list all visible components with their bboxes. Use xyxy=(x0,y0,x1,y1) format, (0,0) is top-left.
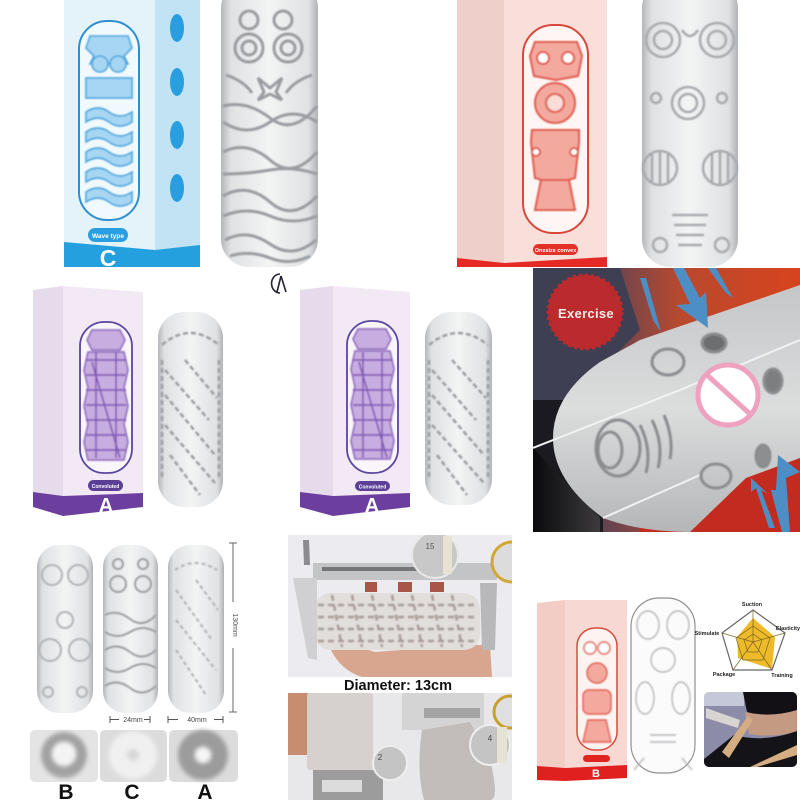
panel: purple convoluted box, left xyxy=(33,286,143,517)
chart: radar: Package xyxy=(713,672,735,678)
caliper, left xyxy=(313,770,383,800)
starburst badge xyxy=(548,275,622,349)
ruler inset, left: 2 xyxy=(378,753,383,762)
photo: lifestyle xyxy=(704,692,797,767)
product: clear wave sleeve xyxy=(221,0,318,267)
panel: blue wave type box xyxy=(64,0,200,271)
dimension: 24mm: 24mm xyxy=(123,717,143,724)
arrows: blue pressure arrows xyxy=(640,268,800,532)
dimension: 24mm xyxy=(110,716,150,724)
icon: red sleeve diagram xyxy=(523,25,588,233)
product: close-up clear tube xyxy=(533,285,800,532)
panel: red box B xyxy=(537,600,627,781)
ruler inset, right xyxy=(470,725,510,765)
dimension: 40mm: 40mm xyxy=(187,717,207,724)
panel: length measurement photos xyxy=(288,693,526,800)
label: wave type xyxy=(88,228,128,242)
letter A: A xyxy=(99,495,113,517)
label: convex: Onesize convex xyxy=(535,248,577,254)
chart: radar: Training xyxy=(771,673,793,679)
ruler inset, left xyxy=(373,746,407,780)
label: convoluted: Convoluted xyxy=(92,484,119,490)
opening view A xyxy=(169,730,238,782)
letter C: C xyxy=(100,245,116,271)
hand at left xyxy=(288,693,308,755)
opening view B xyxy=(30,730,98,782)
product: sleeve A xyxy=(168,545,224,713)
caliper xyxy=(293,535,512,660)
label: exercise: Exercise xyxy=(558,306,614,321)
dimension: 40mm xyxy=(168,716,223,724)
product: clear convex sleeve xyxy=(642,0,738,267)
product: sleeve, right xyxy=(419,722,495,800)
panel: pink convex box xyxy=(457,0,607,267)
product: clear spiral sleeve, right xyxy=(425,312,492,505)
inset reading: 15 xyxy=(426,542,435,551)
label: wave type: Wave type xyxy=(92,233,124,240)
panel: purple convoluted box, right xyxy=(300,286,410,517)
radar labels: Suction xyxy=(742,602,763,608)
product: clear sleeve outline xyxy=(631,598,695,773)
product: textured sleeve xyxy=(315,593,480,650)
chart: radar: Stimulate xyxy=(695,631,719,637)
chart: radar xyxy=(695,602,800,679)
icon: purple sleeve diagram xyxy=(80,322,132,473)
fingers behind sleeve xyxy=(365,582,444,592)
panel: three sleeves comparison xyxy=(30,543,238,800)
ruler inset, right: 4 xyxy=(488,734,493,743)
black stripe xyxy=(533,448,600,532)
heading: diameter: Diameter: 13cm xyxy=(344,678,452,694)
label: convex xyxy=(533,244,578,255)
label: convoluted xyxy=(355,481,390,491)
panel: exercise photo xyxy=(533,268,800,532)
chart: radar: Elasticity xyxy=(776,626,800,632)
product: sleeve, left xyxy=(307,693,373,770)
dimension: height 130mm xyxy=(229,543,238,712)
label: convoluted xyxy=(88,480,123,491)
product: sleeve B xyxy=(37,545,93,713)
letter B: B xyxy=(592,768,600,780)
dimension: height 130mm: 130mm xyxy=(231,613,238,637)
icon: purple sleeve diagram xyxy=(347,321,398,473)
opening view C xyxy=(100,730,167,782)
icon: red sleeve diagram xyxy=(577,628,617,750)
logo xyxy=(272,274,286,293)
pill label xyxy=(583,755,610,762)
icon: blue sleeve diagram xyxy=(79,21,139,220)
icons: side feature badges xyxy=(170,14,184,202)
letter A: A xyxy=(365,495,379,517)
panel: caliper measurement photo xyxy=(288,535,512,677)
censor mark: pink circle xyxy=(698,365,758,425)
product: sleeve C xyxy=(103,545,158,713)
caliper, right xyxy=(402,693,512,730)
product: clear spiral sleeve, left xyxy=(158,312,223,507)
label: convoluted: Convoluted xyxy=(359,484,386,490)
hand xyxy=(330,645,492,677)
